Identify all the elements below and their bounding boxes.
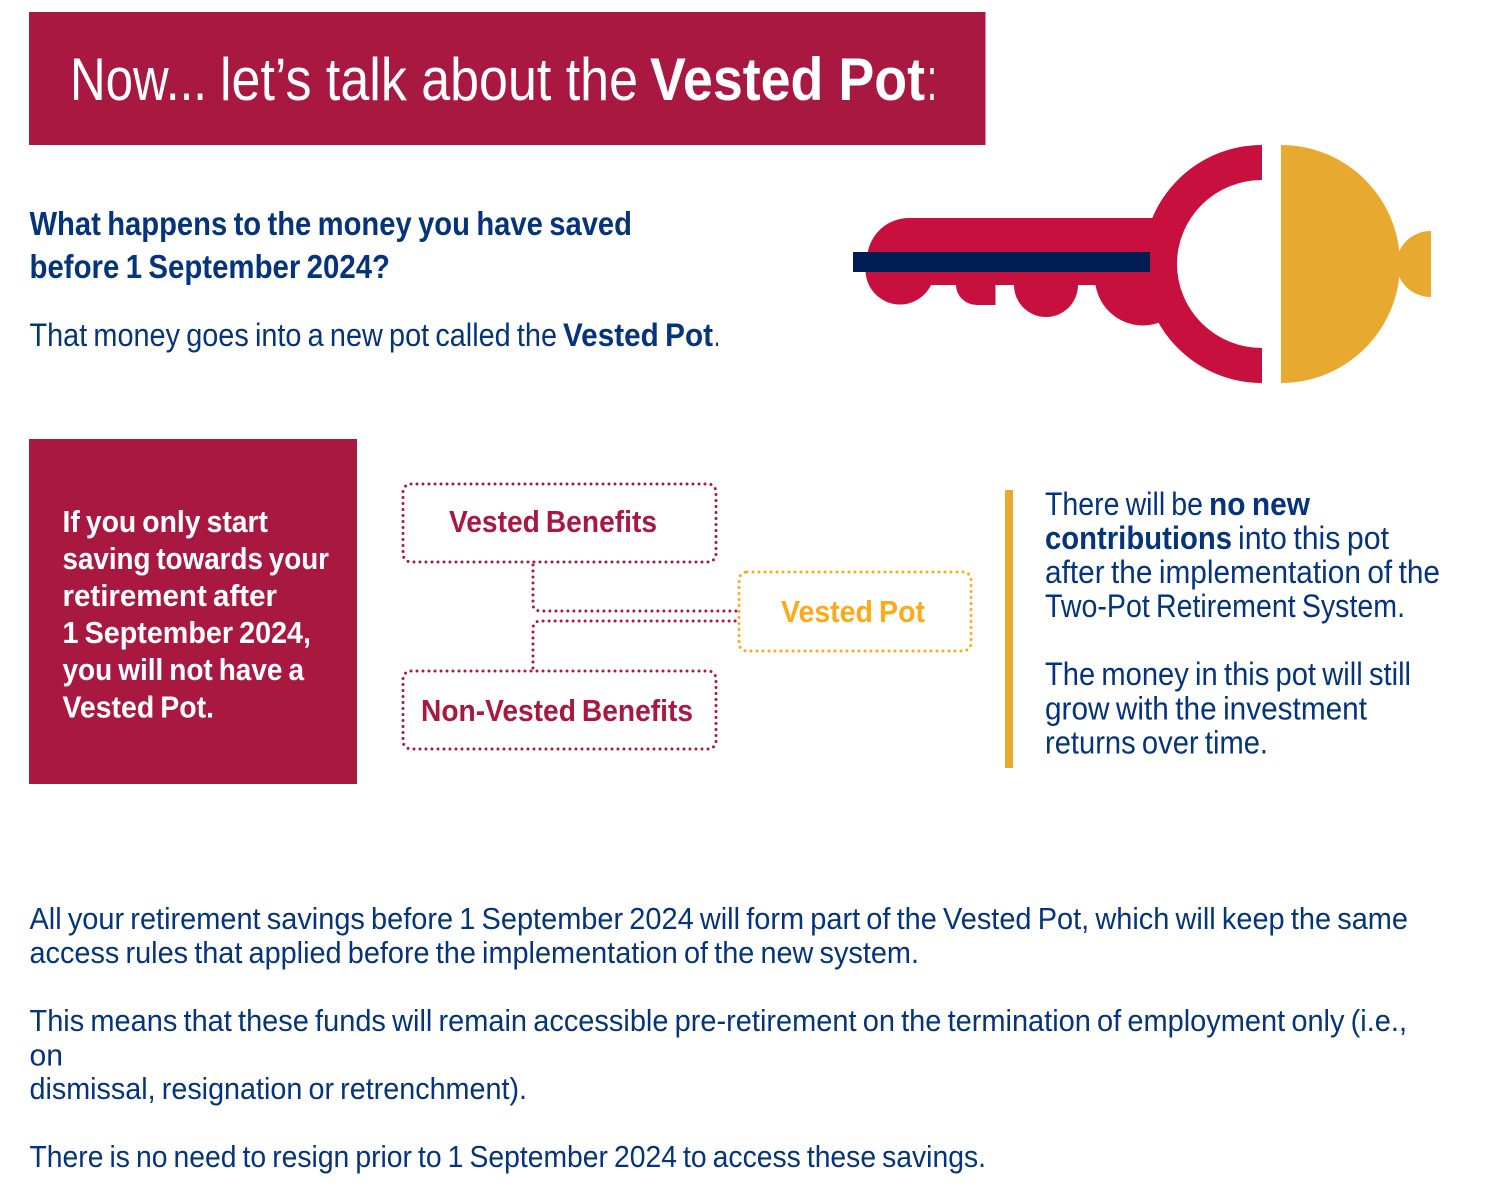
side note: no new contributions: grow with the investment — [1045, 690, 1367, 726]
side note: no new contributions: returns over time. — [1045, 724, 1268, 760]
bottom text block: All your retirement savings before 1 September 2024 will form part of the Vested Pot, which will keep the same — [30, 901, 1408, 936]
question heading — [30, 205, 632, 285]
title: Now... — [70, 46, 207, 113]
intro sentence: That money goes into a new pot called the — [30, 317, 557, 353]
bottom text block: on — [30, 1038, 63, 1072]
box: vested benefits — [403, 484, 716, 562]
key navy slot — [853, 252, 1150, 272]
callout: no vested pot: Vested Pot. — [62, 690, 214, 724]
bottom text block: access rules that applied before the implementation of the new system. — [30, 935, 919, 970]
intro sentence: . — [714, 317, 720, 353]
side note: no new contributions: contributions — [1045, 520, 1232, 556]
callout: no vested pot: saving towards your — [62, 541, 329, 576]
box: vested pot: Vested Pot — [781, 594, 925, 629]
side note: no new contributions: into this pot — [1238, 520, 1389, 556]
side note: no new contributions — [1045, 486, 1440, 760]
callout: no vested pot: retirement after — [62, 578, 277, 613]
title: : — [927, 46, 937, 113]
bottom text block: There is no need to resign prior to 1 September 2024 to access these savings. — [30, 1139, 986, 1174]
bottom text block: This means that these funds will remain accessible pre-retirement on the termination of employment only (i.e., — [30, 1003, 1407, 1038]
callout: no vested pot — [29, 439, 357, 784]
side note: no new contributions: after the implementation of the — [1045, 554, 1440, 590]
icon: key — [853, 145, 1431, 383]
question heading: before 1 September 2024? — [30, 248, 390, 285]
box: non-vested benefits — [403, 671, 716, 749]
title — [70, 46, 937, 113]
key gold bow — [1281, 145, 1431, 383]
box: non-vested benefits: Non-Vested Benefits — [421, 693, 693, 728]
key ring and shaft — [866, 145, 1262, 383]
diagram: benefits flow — [403, 484, 971, 749]
callout: no vested pot: you will not have a — [62, 652, 305, 687]
callout: no vested pot: If you only start — [62, 504, 268, 539]
side note: no new contributions: Two-Pot Retirement System. — [1045, 588, 1405, 624]
question heading: What happens to the money you have saved — [30, 205, 632, 242]
callout: no vested pot: 1 September 2024, — [62, 615, 311, 650]
accent bar — [1005, 490, 1013, 768]
side note: no new contributions: The money in this pot will still — [1045, 656, 1411, 692]
intro sentence: Vested Pot — [563, 317, 713, 353]
title: let’s talk about the — [220, 46, 638, 113]
bottom text block — [30, 901, 1408, 1174]
side note: no new contributions: There will be — [1045, 486, 1203, 522]
box: vested benefits: Vested Benefits — [449, 504, 657, 539]
side note: no new contributions: no new — [1209, 486, 1310, 522]
box: vested pot — [739, 572, 971, 651]
connectors — [533, 565, 737, 668]
title: Vested Pot — [650, 46, 925, 113]
bottom text block: dismissal, resignation or retrenchment). — [30, 1071, 527, 1106]
title banner — [29, 12, 986, 145]
